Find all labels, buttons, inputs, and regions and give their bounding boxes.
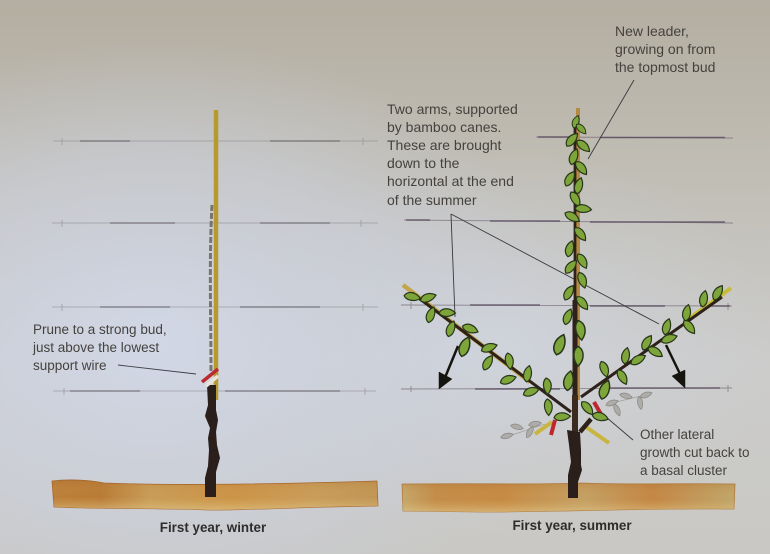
label: two arms: Two arms, supported	[387, 101, 518, 117]
label: new leader: New leader,	[615, 23, 689, 39]
red pruning cuts	[551, 402, 602, 435]
caption: first year, summer: First year, summer	[512, 518, 632, 533]
label: other lateral growth: a basal cluster	[640, 463, 728, 478]
leader line: new leader	[588, 80, 634, 159]
label: two arms: down to the	[387, 155, 460, 171]
bamboo cane (winter)	[214, 110, 218, 400]
panel: first year, winter	[32, 110, 378, 535]
support wires (winter)	[52, 138, 378, 395]
leaves: right arm	[579, 284, 725, 423]
label: other lateral growth: Other lateral	[640, 427, 714, 442]
support wires (summer)	[401, 137, 733, 392]
label: prune: support wire	[33, 358, 107, 373]
bamboo canes (summer)	[403, 108, 731, 443]
leader line: prune	[118, 365, 196, 374]
leader line: lateral growth	[606, 417, 633, 440]
ground strip (summer)	[402, 483, 735, 512]
label: other lateral growth: growth cut back to	[640, 445, 750, 460]
arrow: left arm down	[439, 346, 458, 389]
arrow: right arm down	[666, 345, 685, 388]
label: new leader: growing on from	[615, 41, 715, 57]
removed lateral growth, right	[605, 390, 653, 417]
trunk (winter)	[205, 385, 220, 497]
leaves: central leader	[551, 114, 592, 391]
ground strip (winter)	[52, 480, 378, 510]
leader line: two arms	[451, 214, 659, 324]
label: two arms: by bamboo canes.	[387, 119, 501, 135]
pruned stem (winter)	[210, 205, 212, 372]
label: new leader: the topmost bud	[615, 59, 715, 75]
label: two arms: of the summer	[387, 192, 477, 208]
label: two arms: These are brought	[387, 137, 502, 153]
label: prune: Prune to a strong bud,	[33, 322, 167, 337]
red pruning cut (winter)	[202, 369, 218, 386]
branches and trunk (summer)	[412, 122, 722, 498]
panel: first year, summer	[387, 23, 750, 533]
leaves: left arm	[404, 291, 571, 421]
removed lateral growth, left	[500, 420, 545, 440]
label: prune: just above the lowest	[32, 340, 159, 355]
label: two arms: horizontal at the end	[387, 173, 514, 189]
caption: first year, winter: First year, winter	[160, 520, 267, 535]
